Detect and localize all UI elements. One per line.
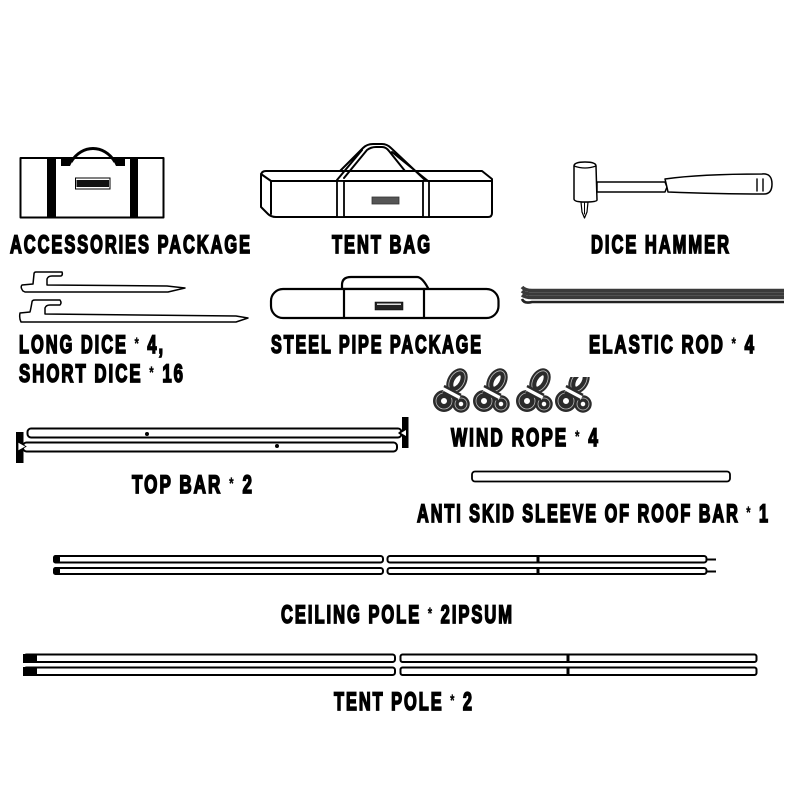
icon: elastic rods [522, 287, 784, 303]
panel: tent pole: 2 [456, 688, 474, 716]
heading: wind rope: WIND ROPE [451, 424, 622, 452]
icon: upper tent pole [23, 654, 756, 663]
heading: top bar: * [229, 474, 236, 493]
heading: tent pole: TENT POLE [334, 688, 501, 716]
panel: top bar: 2 [236, 471, 254, 499]
icon: upper top bar [28, 417, 408, 448]
heading: steel pipe package: STEEL PIPE PACKAGE [271, 331, 483, 359]
heading: elastic rod: * [732, 334, 738, 353]
panel: wind rope [436, 365, 600, 452]
heading: ceiling pole: CEILING POLE [281, 601, 493, 629]
heading: short dice: 16 [156, 360, 185, 388]
text: 4 [582, 424, 600, 452]
panel: tent pole [23, 654, 756, 716]
heading: short dice: * [149, 363, 156, 382]
heading: long dice: 4, [141, 331, 165, 359]
panel: steel pipe package [271, 277, 498, 359]
icon: pipe bag [271, 277, 498, 318]
icon: sleeve [472, 472, 730, 482]
panel: long and short dice [19, 272, 248, 388]
panel: accessories package [10, 148, 252, 259]
heading: short dice: SHORT DICE [19, 360, 203, 388]
icon: lower tent pole [23, 667, 756, 676]
heading: tent pole: * [450, 691, 456, 710]
heading: ceiling pole: * [428, 604, 434, 623]
icon: tent bag [261, 144, 492, 217]
panel: ceiling pole [53, 555, 716, 629]
heading: long dice: LONG DICE [19, 331, 185, 359]
heading: long dice: * [135, 334, 141, 353]
icon: lower ceiling pole [53, 567, 716, 575]
panel: elastic rod: 4 [738, 331, 756, 359]
heading: accessories package: ACCESSORIES PACKAGE [10, 231, 252, 259]
icon: accessories bag [20, 148, 164, 218]
panel: tent bag [261, 144, 492, 259]
heading: top bar: TOP BAR [132, 471, 265, 499]
heading: elastic rod: ELASTIC ROD [589, 331, 790, 359]
icon: rope coils [436, 365, 593, 410]
icon: long stake [20, 300, 248, 322]
heading: tent bag: TENT BAG [332, 231, 432, 259]
panel: top bar [16, 417, 408, 499]
panel: elastic rod [522, 287, 784, 359]
text: 1 [753, 500, 770, 528]
icon: hammer [574, 162, 772, 218]
heading: wind rope: * [575, 427, 582, 446]
heading: ceiling pole: 2IPSUM [434, 601, 514, 629]
panel: dice hammer [574, 162, 772, 259]
panel: anti skid sleeve [417, 472, 770, 528]
icon: upper ceiling pole [53, 555, 716, 564]
icon: lower top bar [16, 432, 397, 463]
icon: short stake [21, 272, 185, 292]
heading: anti skid sleeve: * [746, 503, 753, 522]
